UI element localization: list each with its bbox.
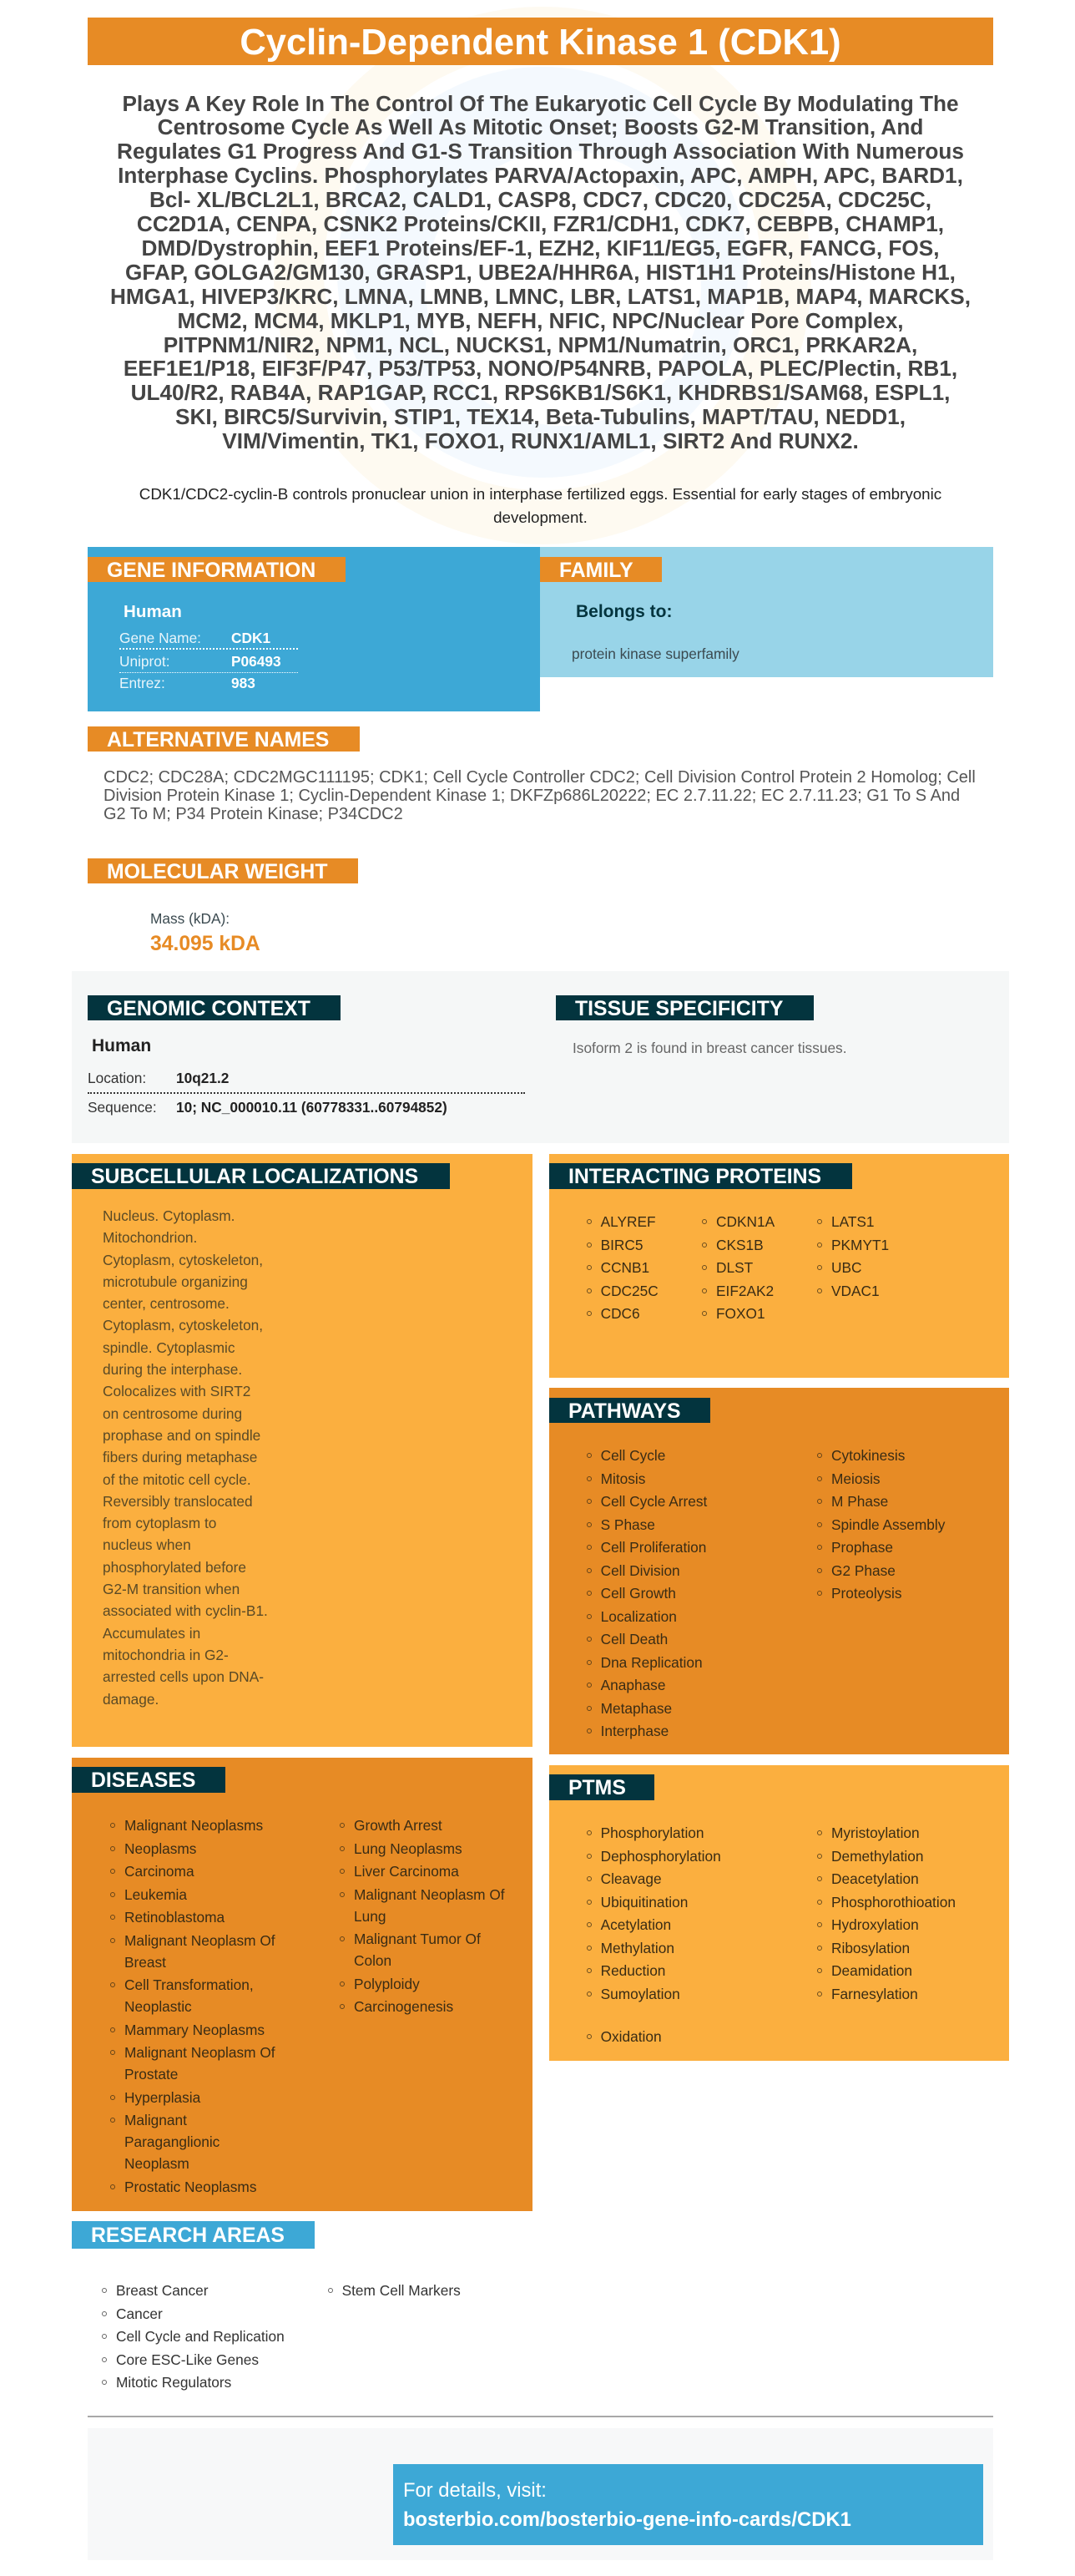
entrez row: 983	[231, 675, 255, 691]
sequence row: Sequence:	[88, 1099, 157, 1116]
localization text: Mitochondrion.	[103, 1229, 197, 1246]
protein function description: Centrosome Cycle As Well As Mitotic Onset; Boosts G2-M Transition, And	[158, 114, 923, 139]
heading: research areas: RESEARCH AREAS	[91, 2224, 285, 2247]
localization text: arrested cells upon DNA-	[103, 1668, 264, 1685]
family value: protein kinase superfamily	[572, 645, 739, 662]
list: column 1: Metaphase	[601, 1700, 672, 1717]
panel: interacting proteins	[549, 1154, 1009, 1378]
heading: molecular weight: MOLECULAR WEIGHT	[107, 861, 327, 883]
list: column 3: LATS1	[831, 1213, 875, 1230]
list: column 2: Deacetylation	[831, 1870, 919, 1887]
list: column 1	[587, 1824, 721, 2045]
list: column 2: Prophase	[831, 1539, 893, 1556]
list: column 1: Mammary Neoplasms	[124, 2021, 265, 2037]
species label: Human	[92, 1036, 151, 1055]
list: column 2	[817, 1824, 956, 2002]
list: column 1: Neoplasms	[124, 1840, 196, 1857]
heading: research areas	[72, 2221, 315, 2249]
list: column 2: Proteolysis	[831, 1585, 902, 1602]
list: column 2: Malignant Neoplasm Of	[354, 1885, 505, 1902]
list: column 2: FOXO1	[716, 1305, 765, 1322]
list: column 1: Cell Cycle Arrest	[601, 1493, 707, 1510]
list: column 1: Prostatic Neoplasms	[124, 2178, 256, 2194]
list: column 1: Mitotic Regulators	[116, 2374, 231, 2391]
panel: diseases	[72, 1758, 532, 2211]
list: column 1: Cell Transformation,	[124, 1976, 254, 1993]
belongs to label: Belongs to:	[576, 602, 673, 621]
list: column 2: CDKN1A	[716, 1213, 775, 1230]
heading: alternative names: ALTERNATIVE NAMES	[107, 729, 329, 752]
list: column 2: Phosphorothioation	[831, 1894, 956, 1910]
gene name row	[119, 627, 298, 650]
list: column 3	[817, 1213, 889, 1299]
localization text	[103, 1207, 268, 1708]
list: column 1: Malignant Neoplasms	[124, 1817, 263, 1834]
list: column 1: CDC25C	[601, 1283, 659, 1299]
summary sentence: CDK1/CDC2-cyclin-B controls pronuclear union in interphase fertilized eggs. Essential for early stages of embryonic	[139, 485, 941, 503]
list: column 1: Cell Growth	[601, 1585, 676, 1602]
protein function description: Bcl- XL/BCL2L1, BRCA2, CALD1, CASP8, CDC7, CDC20, CDC25A, CDC25C,	[149, 187, 931, 212]
list: column 1: Paraganglionic	[124, 2133, 220, 2150]
heading: diseases: DISEASES	[91, 1769, 195, 1792]
list: column 1	[587, 1447, 708, 1739]
localization text: fibers during metaphase	[103, 1449, 257, 1465]
alternative names text: CDC2; CDC28A; CDC2MGC111195; CDK1; Cell Cycle Controller CDC2; Cell Division Control Protein 2 Homolog; Cell	[103, 768, 976, 787]
heading: subcellular localizations: SUBCELLULAR LOCALIZATIONS	[91, 1166, 418, 1188]
localization text: Cytoplasm, cytoskeleton,	[103, 1317, 263, 1334]
alternative names text: Division Protein Kinase 1; Cyclin-Dependent Kinase 1; DKFZp686L20222; EC 2.7.11.22; EC 2.7.11.23; G1 To S And	[103, 787, 960, 805]
heading: pathways: PATHWAYS	[568, 1400, 681, 1423]
list: column 1: Breast Cancer	[116, 2282, 208, 2299]
protein function description: HMGA1, HIVEP3/KRC, LMNA, LMNB, LMNC, LBR, LATS1, MAP1B, MAP4, MARCKS,	[110, 284, 971, 309]
list: column 2: EIF2AK2	[716, 1283, 774, 1299]
background watermark logo	[274, 7, 811, 544]
list: column 1: Breast	[124, 1954, 166, 1971]
list: column 2: Stem Cell Markers	[342, 2282, 461, 2299]
panel: gene information	[88, 547, 540, 711]
list: column 2: Lung	[354, 1907, 386, 1924]
localization text: center, centrosome.	[103, 1295, 230, 1312]
panel: research areas	[72, 2221, 461, 2391]
protein function description: EEF1E1/P18, EIF3F/P47, P53/TP53, NONO/P54NRB, PAPOLA, PLEC/Plectin, RB1,	[124, 356, 957, 381]
list: column 3: VDAC1	[831, 1283, 880, 1299]
protein function description: DMD/Dystrophin, EEF1 Proteins/EF-1, EZH2, KIF11/EG5, EGFR, FANCG, FOS,	[142, 235, 940, 261]
list: column 1: Interphase	[601, 1723, 669, 1739]
list: column 1: Carcinoma	[124, 1863, 194, 1880]
list: column 1: Oxidation	[601, 2028, 662, 2045]
list: column 1: Neoplastic	[124, 1998, 192, 2015]
list: column 1: Malignant Neoplasm Of	[124, 2044, 275, 2061]
list: column 2	[817, 1447, 945, 1602]
heading: interacting proteins: INTERACTING PROTEINS	[568, 1166, 821, 1188]
list: column 2: Meiosis	[831, 1470, 881, 1486]
list: column 1: CCNB1	[601, 1259, 649, 1276]
callout: details link	[393, 2464, 983, 2545]
list: column 1: Cell Proliferation	[601, 1539, 706, 1556]
heading: tissue specificity: TISSUE SPECIFICITY	[575, 998, 783, 1020]
localization text: phosphorylated before	[103, 1559, 246, 1576]
localization text: microtubule organizing	[103, 1273, 248, 1290]
list: column 2	[702, 1213, 775, 1322]
list: column 2: Myristoylation	[831, 1824, 920, 1841]
panel: pathways	[549, 1388, 1009, 1754]
summary sentence	[139, 485, 941, 526]
heading: pathways	[549, 1398, 710, 1423]
localization text: Cytoplasm, cytoskeleton,	[103, 1252, 263, 1268]
localization text: Reversibly translocated	[103, 1493, 253, 1510]
protein function description: SKI, BIRC5/Survivin, STIP1, TEX14, Beta-Tubulins, MAPT/TAU, NEDD1,	[175, 404, 906, 429]
list: column 1: Sumoylation	[601, 1986, 680, 2002]
heading: family	[540, 557, 662, 582]
list: column 1: Mitosis	[601, 1470, 645, 1486]
heading: gene information: GENE INFORMATION	[107, 559, 315, 582]
panel: family	[540, 547, 993, 677]
list: column 1: Cleavage	[601, 1870, 662, 1887]
details url: bosterbio.com/bosterbio-gene-info-cards/CDK1	[403, 2508, 851, 2531]
list: column 1: S Phase	[601, 1516, 655, 1533]
protein function description: Interphase Cyclins. Phosphorylates PARVA/Actopaxin, APC, AMPH, APC, BARD1,	[118, 163, 963, 188]
tissue specificity text: Isoform 2 is found in breast cancer tissues.	[573, 1040, 846, 1056]
list: column 2: Lung Neoplasms	[354, 1840, 462, 1857]
entrez row: Entrez:	[119, 675, 165, 691]
alternative names text: G2 To M; P34 Protein Kinase; P34CDC2	[103, 805, 403, 823]
list: column 2	[340, 1817, 505, 2015]
heading: family: FAMILY	[559, 559, 633, 582]
list: column 1: Leukemia	[124, 1885, 187, 1902]
protein function description: UL40/R2, RAB4A, RAP1GAP, RCC1, RPS6KB1/S6K1, KHDRBS1/SAM68, ESPL1,	[131, 380, 950, 405]
list: column 1: BIRC5	[601, 1236, 643, 1253]
list: column 1: Cell Cycle	[601, 1447, 665, 1464]
uniprot row: Uniprot:	[119, 653, 170, 670]
list: column 1: Prostate	[124, 2066, 178, 2083]
panel: genomic context and tissue specificity	[72, 971, 1009, 1143]
uniprot row	[119, 650, 298, 673]
heading: PTMs: PTMS	[568, 1777, 626, 1799]
list: column 2: Liver Carcinoma	[354, 1863, 459, 1880]
list: column 2: Cytokinesis	[831, 1447, 905, 1464]
mass value: 34.095 kDA	[150, 933, 260, 955]
localization text: nucleus when	[103, 1536, 191, 1553]
localization text: of the mitotic cell cycle.	[103, 1471, 251, 1488]
list: column 1: Dna Replication	[601, 1653, 703, 1670]
list: column 1: Anaphase	[601, 1677, 665, 1693]
summary sentence: development.	[493, 509, 588, 526]
heading: diseases	[72, 1767, 225, 1793]
protein function description: MCM2, MCM4, MKLP1, MYB, NEFH, NFIC, NPC/Nuclear Pore Complex,	[177, 308, 904, 333]
localization text: Colocalizes with SIRT2	[103, 1383, 250, 1399]
heading: PTMs	[549, 1774, 654, 1800]
localization text: from cytoplasm to	[103, 1515, 216, 1531]
localization text: on centrosome during	[103, 1405, 242, 1422]
list: column 1: Methylation	[601, 1939, 674, 1956]
list: column 2: Ribosylation	[831, 1939, 910, 1956]
list: column 1: Reduction	[601, 1962, 665, 1979]
list: column 1: Hyperplasia	[124, 2089, 200, 2106]
title banner: Cyclin-Dependent Kinase 1 (CDK1)	[240, 23, 841, 63]
entrez row	[119, 675, 255, 691]
protein function description: Regulates G1 Progress And G1-S Transition Through Association With Numerous	[117, 139, 964, 164]
list: column 1: Core ESC-Like Genes	[116, 2351, 259, 2368]
gene name row: Gene Name:	[119, 630, 201, 646]
list: column 2: M Phase	[831, 1493, 888, 1510]
list: column 1: Malignant	[124, 2112, 187, 2128]
list: column 1: Cell Division	[601, 1561, 680, 1578]
sequence row: 10; NC_000010.11 (60778331..60794852)	[176, 1099, 447, 1116]
list: column 2: Malignant Tumor Of	[354, 1931, 481, 1947]
protein function description	[110, 90, 971, 453]
list: column 2: Hydroxylation	[831, 1916, 919, 1933]
panel: footer	[88, 2428, 993, 2560]
localization text: spindle. Cytoplasmic	[103, 1339, 235, 1356]
list: column 2: CKS1B	[716, 1236, 764, 1253]
list: column 2: Carcinogenesis	[354, 1998, 453, 2015]
list: column 1: Ubiquitination	[601, 1894, 688, 1910]
list: column 1: Phosphorylation	[601, 1824, 704, 1841]
protein function description: Plays A Key Role In The Control Of The Eukaryotic Cell Cycle By Modulating The	[122, 90, 959, 115]
heading: genomic context: GENOMIC CONTEXT	[107, 998, 310, 1020]
list: column 1: ALYREF	[601, 1213, 656, 1230]
list: column 3: PKMYT1	[831, 1236, 889, 1253]
list: column 2: G2 Phase	[831, 1561, 896, 1578]
localization text: during the interphase.	[103, 1361, 242, 1378]
list: column 1: Cancer	[116, 2305, 163, 2321]
list: column 3: UBC	[831, 1259, 861, 1276]
list: column 1: Retinoblastoma	[124, 1909, 225, 1926]
list: column 2: Colon	[354, 1952, 391, 1969]
localization text: Accumulates in	[103, 1625, 200, 1642]
localization text: associated with cyclin-B1.	[103, 1602, 268, 1619]
list: column 1: Localization	[601, 1608, 677, 1625]
gene name row: CDK1	[231, 630, 270, 646]
details label: For details, visit:	[403, 2479, 547, 2502]
protein function description: VIM/Vimentin, TK1, FOXO1, RUNX1/AML1, SIRT2 And RUNX2.	[222, 428, 859, 453]
mass label: Mass (kDA):	[150, 910, 230, 927]
list: column 1	[110, 1817, 275, 2194]
list: column 2: Demethylation	[831, 1847, 923, 1864]
list: column 1: Cell Death	[601, 1631, 668, 1647]
list: column 2: Deamidation	[831, 1962, 912, 1979]
species label: Human	[124, 602, 182, 621]
list: column 2: DLST	[716, 1259, 753, 1276]
list: column 1: Cell Cycle and Replication	[116, 2328, 285, 2345]
list: column 1: Malignant Neoplasm Of	[124, 1932, 275, 1949]
panel: alternative names	[88, 726, 976, 823]
list: column 2: Farnesylation	[831, 1986, 918, 2002]
localization text: Nucleus. Cytoplasm.	[103, 1207, 235, 1224]
list: column 1	[587, 1213, 659, 1322]
alternative names text	[103, 768, 976, 823]
localization text: mitochondria in G2-	[103, 1647, 229, 1663]
location row: Location:	[88, 1070, 146, 1086]
localization text: prophase and on spindle	[103, 1427, 260, 1444]
localization text: damage.	[103, 1691, 159, 1708]
protein function description: PITPNM1/NIR2, NPM1, NCL, NUCKS1, NPM1/Numatrin, ORC1, PRKAR2A,	[164, 332, 917, 357]
uniprot row: P06493	[231, 653, 281, 670]
title banner	[88, 18, 993, 65]
list: column 2: Spindle Assembly	[831, 1516, 945, 1533]
list: column 1	[102, 2282, 285, 2391]
list: column 2: Growth Arrest	[354, 1817, 442, 1834]
location row: 10q21.2	[176, 1070, 229, 1086]
list: column 1: Neoplasm	[124, 2155, 189, 2172]
location row	[88, 1067, 525, 1094]
panel: subcellular localizations	[72, 1154, 532, 1747]
list: column 1: Dephosphorylation	[601, 1847, 721, 1864]
protein function description: GFAP, GOLGA2/GM130, GRASP1, UBE2A/HHR6A, HIST1H1 Proteins/Histone H1,	[125, 260, 956, 285]
panel: PTMs	[549, 1765, 1009, 2061]
localization text: G2-M transition when	[103, 1581, 240, 1597]
list: column 1: CDC6	[601, 1305, 640, 1322]
list: column 1: Acetylation	[601, 1916, 671, 1933]
panel: molecular weight	[88, 858, 358, 955]
protein function description: CC2D1A, CENPA, CSNK2 Proteins/CKII, FZR1/CDH1, CDK7, CEBPB, CHAMP1,	[137, 211, 944, 236]
list: column 2: Polyploidy	[354, 1976, 420, 1992]
